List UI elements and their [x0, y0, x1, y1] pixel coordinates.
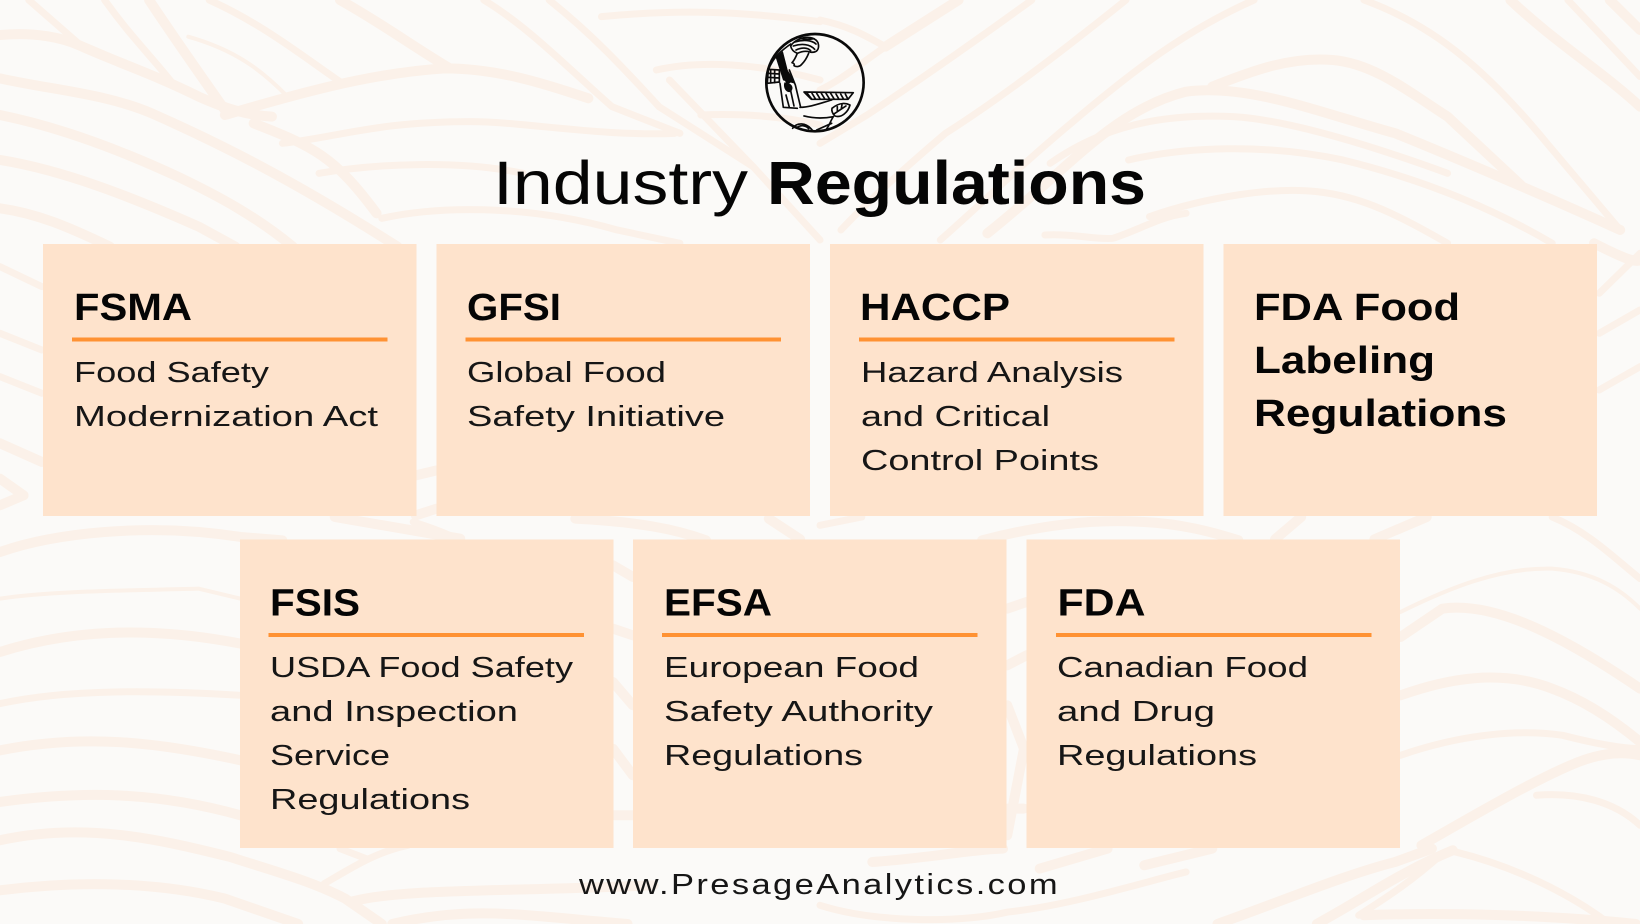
title	[493, 149, 1146, 217]
robe	[766, 44, 791, 94]
description: EFSA: Safety Authority	[664, 696, 934, 728]
heading: FDA Food Labeling Regulations: Regulations	[1254, 393, 1507, 435]
description: EFSA: Regulations	[664, 740, 863, 772]
heading: FSIS: FSIS	[270, 582, 360, 624]
description: FSMA	[74, 357, 378, 433]
dish	[804, 92, 853, 99]
heading: FDA Food Labeling Regulations: FDA Food	[1254, 287, 1460, 329]
description: FDA: and Drug	[1057, 696, 1215, 728]
panel: FDA	[1026, 540, 1400, 848]
description: FSMA: Modernization Act	[74, 401, 378, 433]
description: FDA	[1057, 652, 1308, 772]
description: EFSA	[664, 652, 934, 772]
heading: HACCP: HACCP	[860, 287, 1010, 329]
heading: FDA Food Labeling Regulations: Labeling	[1254, 340, 1435, 382]
panel: GFSI	[436, 244, 810, 516]
title: Industry	[493, 149, 749, 217]
icon: logo figure with dish	[766, 34, 864, 131]
description: FSIS	[270, 652, 574, 816]
description: FSIS: Service	[270, 740, 390, 772]
description: FDA: Canadian Food	[1057, 652, 1308, 684]
panel: EFSA	[633, 540, 1006, 848]
panel: HACCP	[830, 244, 1204, 516]
description: GFSI	[467, 357, 725, 433]
description: EFSA: European Food	[664, 652, 919, 684]
description: FSMA: Food Safety	[74, 357, 270, 389]
heading: GFSI: GFSI	[467, 287, 561, 329]
hair	[791, 37, 819, 53]
description: HACCP: Control Points	[861, 445, 1099, 477]
face	[792, 53, 809, 67]
description: HACCP: Hazard Analysis	[861, 357, 1123, 389]
heading: EFSA: EFSA	[664, 582, 772, 624]
arm and leaf	[800, 100, 833, 129]
panel: FSMA	[43, 244, 416, 516]
description: HACCP	[861, 357, 1123, 477]
heading: FDA: FDA	[1058, 582, 1146, 624]
description: FSIS: Regulations	[270, 784, 470, 816]
heading: FDA Food Labeling Regulations	[1254, 287, 1507, 435]
base	[793, 124, 813, 131]
title: Regulations	[767, 149, 1146, 217]
description: GFSI: Safety Initiative	[467, 401, 725, 433]
footer: website: www.PresageAnalytics.com	[578, 869, 1060, 901]
description: FDA: Regulations	[1057, 740, 1257, 772]
panel: FDA Food Labeling Regulations	[1224, 244, 1597, 516]
description: GFSI: Global Food	[467, 357, 666, 389]
panel: FSIS	[240, 540, 614, 848]
heading: FSMA: FSMA	[74, 287, 192, 329]
description: HACCP: and Critical	[861, 401, 1050, 433]
description: FSIS: USDA Food Safety	[270, 652, 574, 684]
description: FSIS: and Inspection	[270, 696, 518, 728]
